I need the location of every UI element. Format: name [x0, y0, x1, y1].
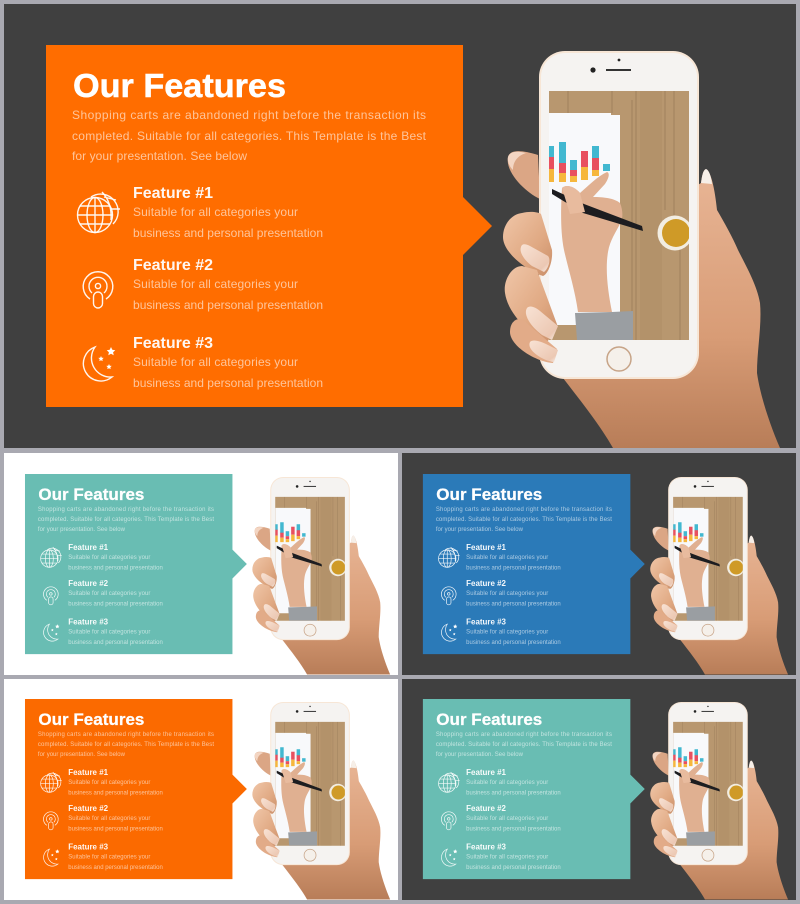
intro text: Shopping carts are abandoned right before the transaction its	[436, 732, 612, 738]
title: Our Features	[38, 485, 144, 504]
icon: moon and stars	[83, 347, 115, 381]
feature 3: Feature #3	[466, 843, 507, 852]
feature 3	[68, 618, 163, 646]
feature 3: Suitable for all categories your	[68, 630, 150, 636]
icon: globe	[78, 192, 120, 232]
icon: podcast	[83, 272, 113, 308]
feature 3: business and personal presentation	[133, 376, 323, 390]
intro text: Shopping carts are abandoned right before the transaction its	[38, 732, 214, 738]
feature 3: Suitable for all categories your	[466, 630, 548, 636]
icon: globe	[439, 772, 460, 792]
phone in hand	[650, 477, 788, 674]
intro text	[38, 732, 214, 758]
intro text: Shopping carts are abandoned right before the transaction its	[38, 507, 214, 513]
feature 1: business and personal presentation	[68, 566, 163, 572]
feature 1: business and personal presentation	[466, 791, 561, 797]
phone in hand	[252, 702, 390, 899]
icon: globe	[41, 772, 62, 792]
feature 3: Suitable for all categories your	[68, 855, 150, 861]
icon: globe	[439, 547, 460, 567]
icon: moon and stars	[441, 624, 457, 641]
feature 3: Feature #3	[68, 618, 109, 627]
feature 1: Feature #1	[68, 768, 109, 777]
feature 2: business and personal presentation	[68, 826, 163, 832]
feature 1: Feature #1	[68, 543, 109, 552]
feature 2: Feature #2	[68, 579, 109, 588]
intro text: completed. Suitable for all categories. This Template is the Best	[72, 129, 427, 143]
feature 3	[466, 618, 561, 646]
slide: teal on white	[4, 453, 398, 675]
feature 1	[133, 185, 323, 240]
icon: podcast	[441, 587, 456, 605]
intro text: for your presentation. See below	[38, 527, 126, 533]
feature 2: Suitable for all categories your	[68, 816, 150, 822]
feature 3: business and personal presentation	[466, 640, 561, 646]
slide content: teal	[423, 699, 788, 899]
icon: moon and stars	[441, 849, 457, 866]
feature 2	[68, 579, 163, 607]
feature 3: Feature #3	[133, 335, 213, 352]
feature 2: Suitable for all categories your	[68, 591, 150, 597]
feature 2	[133, 257, 323, 312]
slide content: blue	[423, 474, 788, 674]
feature 1: Suitable for all categories your	[466, 555, 548, 561]
title: Our Features	[38, 710, 144, 729]
intro text: for your presentation. See below	[72, 149, 247, 163]
feature 2	[466, 579, 561, 607]
intro text: for your presentation. See below	[436, 752, 524, 758]
panel: orange callout	[46, 45, 492, 407]
feature 3: Feature #3	[466, 618, 507, 627]
feature 2: business and personal presentation	[466, 601, 561, 607]
feature 1	[68, 543, 163, 572]
feature 1: business and personal presentation	[466, 566, 561, 572]
icon: globe	[41, 547, 62, 567]
feature 2: Suitable for all categories your	[133, 277, 298, 291]
title: Our Features	[73, 68, 286, 105]
slide: teal on dark	[402, 679, 796, 900]
feature 3	[466, 843, 561, 871]
intro text	[72, 108, 427, 163]
feature 2: business and personal presentation	[68, 601, 163, 607]
feature 3: business and personal presentation	[68, 640, 163, 646]
intro text: for your presentation. See below	[38, 752, 126, 758]
icon: podcast	[43, 812, 58, 830]
title: Our Features	[436, 485, 542, 504]
feature 1: Suitable for all categories your	[68, 780, 150, 786]
feature 1: Feature #1	[466, 543, 507, 552]
feature 1: Suitable for all categories your	[466, 780, 548, 786]
feature 1: business and personal presentation	[68, 791, 163, 797]
panel: teal callout	[423, 699, 645, 879]
slide: blue on dark	[402, 453, 796, 675]
icon: moon and stars	[44, 624, 59, 641]
slide: orange on white	[4, 679, 398, 900]
feature 1: Suitable for all categories your	[133, 205, 298, 219]
intro text: completed. Suitable for all categories. This Template is the Best	[38, 742, 214, 748]
icon: podcast	[43, 587, 58, 605]
title: Our Features	[436, 710, 542, 729]
panel: blue callout	[423, 474, 645, 654]
slide content: teal	[25, 474, 390, 674]
phone in hand	[252, 477, 390, 674]
panel: orange callout	[25, 699, 247, 879]
feature 3: Suitable for all categories your	[133, 355, 298, 369]
icon: podcast	[441, 812, 456, 830]
intro text	[38, 507, 214, 533]
intro text	[436, 507, 612, 533]
feature 1	[466, 768, 561, 797]
intro text: for your presentation. See below	[436, 527, 524, 533]
feature 3: Feature #3	[68, 843, 109, 852]
feature 1: Feature #1	[466, 768, 507, 777]
feature 1: Suitable for all categories your	[68, 555, 150, 561]
phone in hand	[650, 702, 788, 899]
panel: teal callout	[25, 474, 247, 654]
feature 2: Suitable for all categories your	[466, 816, 548, 822]
feature 2	[466, 804, 561, 832]
feature 2: Feature #2	[133, 257, 213, 274]
feature 3	[68, 843, 163, 871]
feature 1	[466, 543, 561, 572]
slide content: orange	[25, 699, 390, 899]
feature 2	[68, 804, 163, 832]
feature 2: Feature #2	[466, 579, 507, 588]
feature 2: Feature #2	[466, 804, 507, 813]
feature 2: business and personal presentation	[466, 826, 561, 832]
intro text	[436, 732, 612, 758]
feature 3: business and personal presentation	[466, 865, 561, 871]
slide: large orange on dark	[4, 4, 796, 448]
feature 2: business and personal presentation	[133, 298, 323, 312]
intro text: Shopping carts are abandoned right before the transaction its	[72, 108, 426, 122]
feature 1: business and personal presentation	[133, 226, 323, 240]
intro text: completed. Suitable for all categories. This Template is the Best	[436, 517, 612, 523]
feature 1: Feature #1	[133, 185, 213, 202]
intro text: Shopping carts are abandoned right before the transaction its	[436, 507, 612, 513]
intro text: completed. Suitable for all categories. This Template is the Best	[38, 517, 214, 523]
feature 2: Feature #2	[68, 804, 109, 813]
feature 3: Suitable for all categories your	[466, 855, 548, 861]
icon: moon and stars	[44, 849, 59, 866]
intro text: completed. Suitable for all categories. This Template is the Best	[436, 742, 612, 748]
phone in hand	[503, 51, 780, 448]
feature 3	[133, 335, 323, 390]
feature 2: Suitable for all categories your	[466, 591, 548, 597]
feature 1	[68, 768, 163, 797]
feature 3: business and personal presentation	[68, 865, 163, 871]
